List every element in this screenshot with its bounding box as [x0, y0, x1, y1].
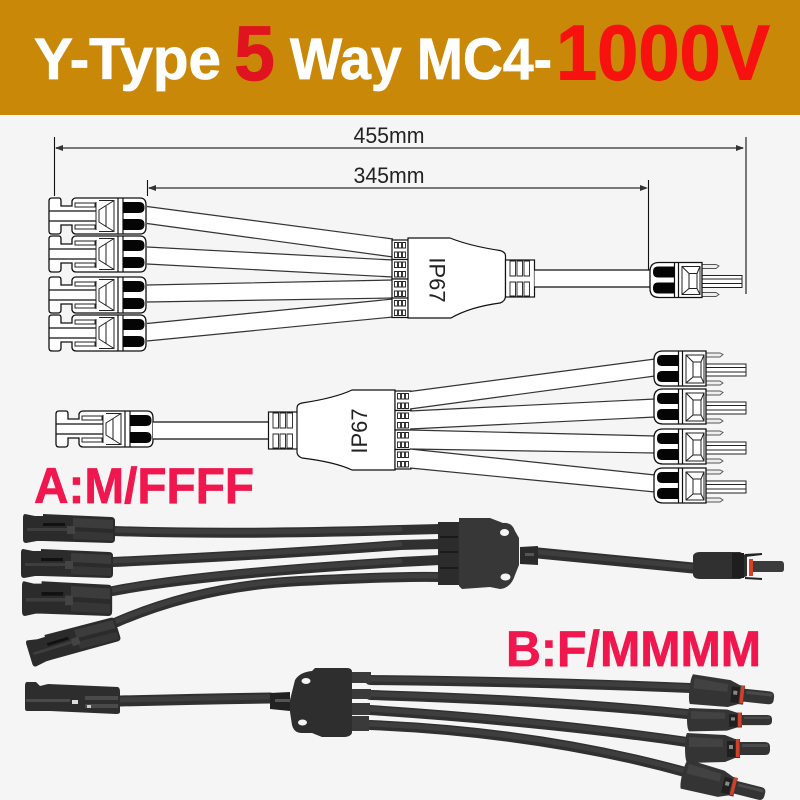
single strain relief	[506, 260, 534, 297]
junction body IP67: IP67	[347, 408, 372, 454]
photo cables	[113, 529, 693, 622]
four outline connectors	[49, 198, 146, 351]
junction body IP67	[408, 238, 506, 318]
photo left connector	[25, 682, 120, 714]
outline cables to four connectors	[410, 359, 655, 492]
four outline connectors	[654, 351, 746, 503]
dimension: 455mm	[54, 123, 746, 294]
photo hub	[438, 518, 538, 589]
photo cables	[120, 679, 690, 772]
single outline cable	[153, 422, 269, 439]
single strain relief	[268, 412, 298, 449]
ribbed strain relief group	[395, 391, 411, 469]
dimension: 345mm: 345mm	[354, 163, 424, 188]
single outline connector	[56, 411, 153, 447]
ribbed strain relief group	[392, 240, 408, 318]
single outline connector	[650, 262, 742, 298]
photo hub	[270, 668, 371, 737]
title: Y-Type: Y-Type	[34, 27, 221, 92]
photo connectors	[21, 514, 121, 667]
title: 1000V: 1000V	[556, 8, 770, 96]
diagram: B outline	[56, 351, 746, 503]
label: A:M/FFFF: A:M/FFFF	[34, 458, 254, 514]
photo: cable B	[25, 668, 776, 800]
dimension: 455mm: 455mm	[354, 123, 424, 148]
dimension: 345mm	[148, 163, 648, 272]
outline cables to four connectors	[147, 206, 393, 341]
photo connectors	[679, 674, 776, 800]
title: Way MC4-: Way MC4-	[290, 27, 552, 92]
diagram: A dimensioned outline	[49, 123, 746, 351]
single outline cable	[534, 270, 652, 287]
junction body IP67	[297, 390, 395, 470]
photo right connector	[693, 552, 784, 580]
header banner	[0, 0, 800, 115]
label: B:F/MMMM: B:F/MMMM	[506, 621, 761, 677]
junction body IP67: IP67	[424, 257, 450, 303]
photo: cable A	[21, 514, 784, 667]
title: 5: 5	[234, 9, 275, 97]
